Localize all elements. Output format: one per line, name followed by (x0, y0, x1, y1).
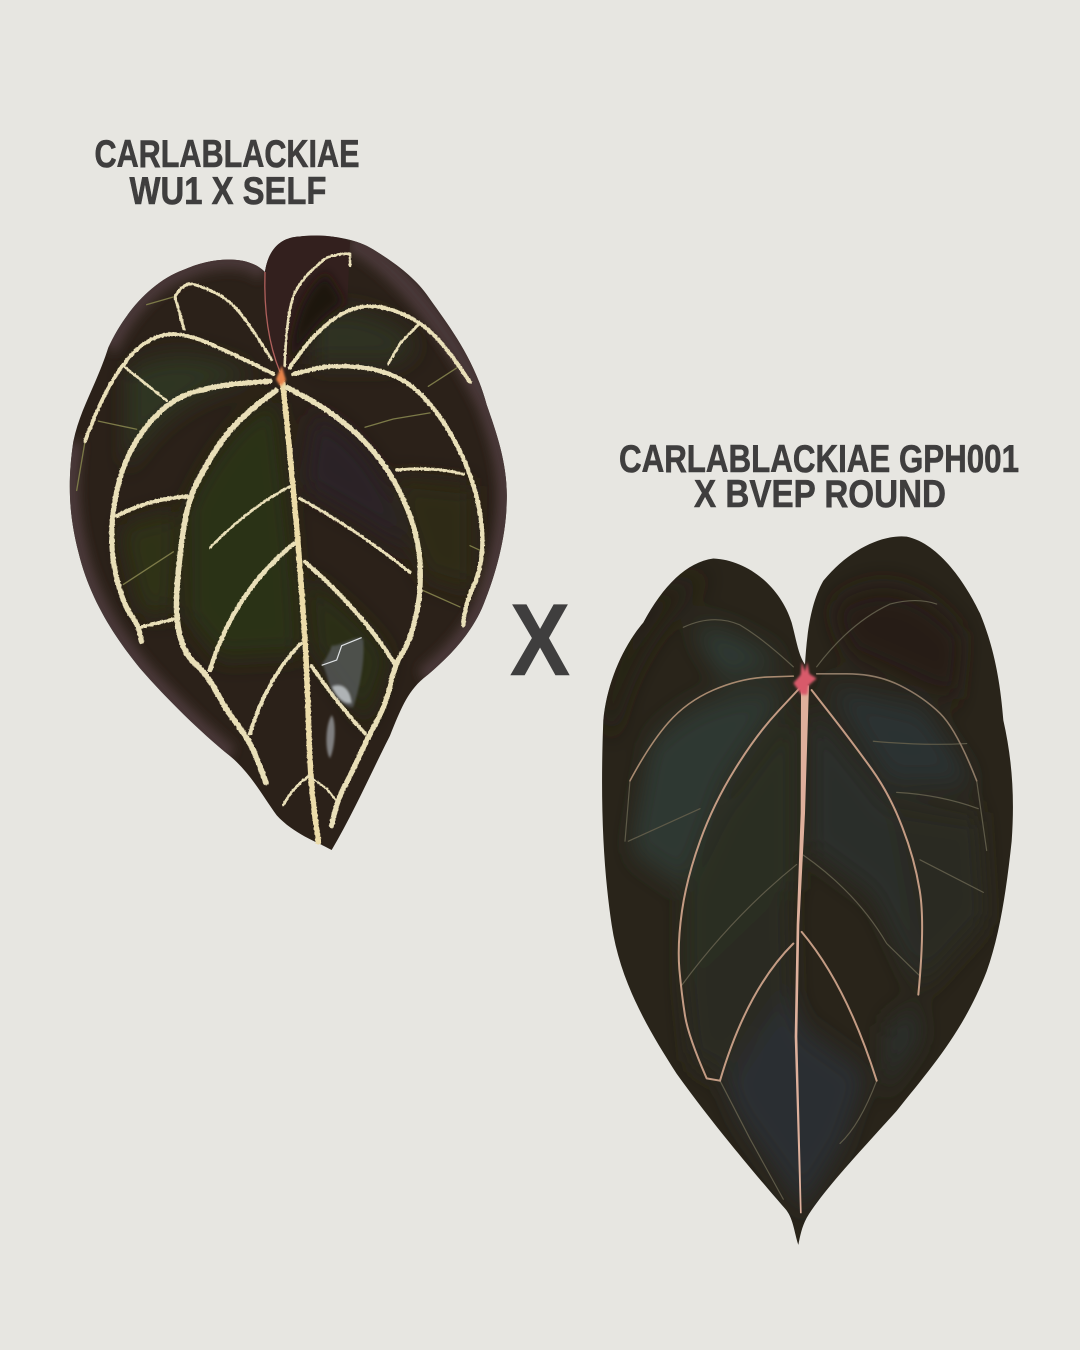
thin olive veinlets (77, 296, 483, 607)
fold shadow (290, 274, 345, 366)
right inner loop (287, 388, 420, 825)
glare spot (322, 638, 364, 758)
pink veins (630, 674, 977, 1081)
right upper loop (289, 306, 470, 382)
heading: left parent (94, 133, 360, 213)
heading: right parent (619, 438, 1019, 516)
leaf blade (602, 536, 1013, 1245)
leaf colour patches (70, 241, 507, 756)
fold pink edge (265, 272, 280, 372)
lateral veins right (388, 323, 420, 364)
midrib (795, 685, 809, 1213)
left inner loop (177, 390, 276, 783)
lateral veins left (210, 486, 290, 548)
leaf margin tint (70, 241, 507, 756)
left leaf: carlablackiae WU1 (70, 236, 507, 850)
folded upper lobe (265, 236, 350, 375)
faint veinlets (625, 601, 987, 1199)
vein junction (793, 662, 817, 695)
leaf blade (70, 236, 507, 850)
right inner loop (812, 690, 922, 995)
left inner loop (679, 688, 800, 1081)
left cross veins (123, 366, 167, 401)
left outer vein (630, 676, 793, 781)
heading: right parent: X BVEP ROUND (694, 473, 946, 516)
main cream veins (85, 254, 482, 842)
fold vein (285, 254, 350, 366)
left upper loop (85, 334, 273, 442)
right outer vein (817, 674, 977, 781)
vein junction (276, 366, 286, 386)
heading: left parent: WU1 X SELF (130, 170, 326, 213)
midrib (283, 382, 318, 842)
left outer loop (112, 381, 270, 642)
cross symbol: X (510, 583, 570, 697)
right leaf: carlablackiae GPH001 x BVEP (600, 536, 1013, 1245)
right outer loop (293, 366, 482, 625)
lower laterals (720, 944, 793, 1081)
heading: left parent: CARLABLACKIAE (94, 133, 360, 176)
leaf colour patches (600, 576, 987, 1209)
top left loop (175, 284, 272, 360)
